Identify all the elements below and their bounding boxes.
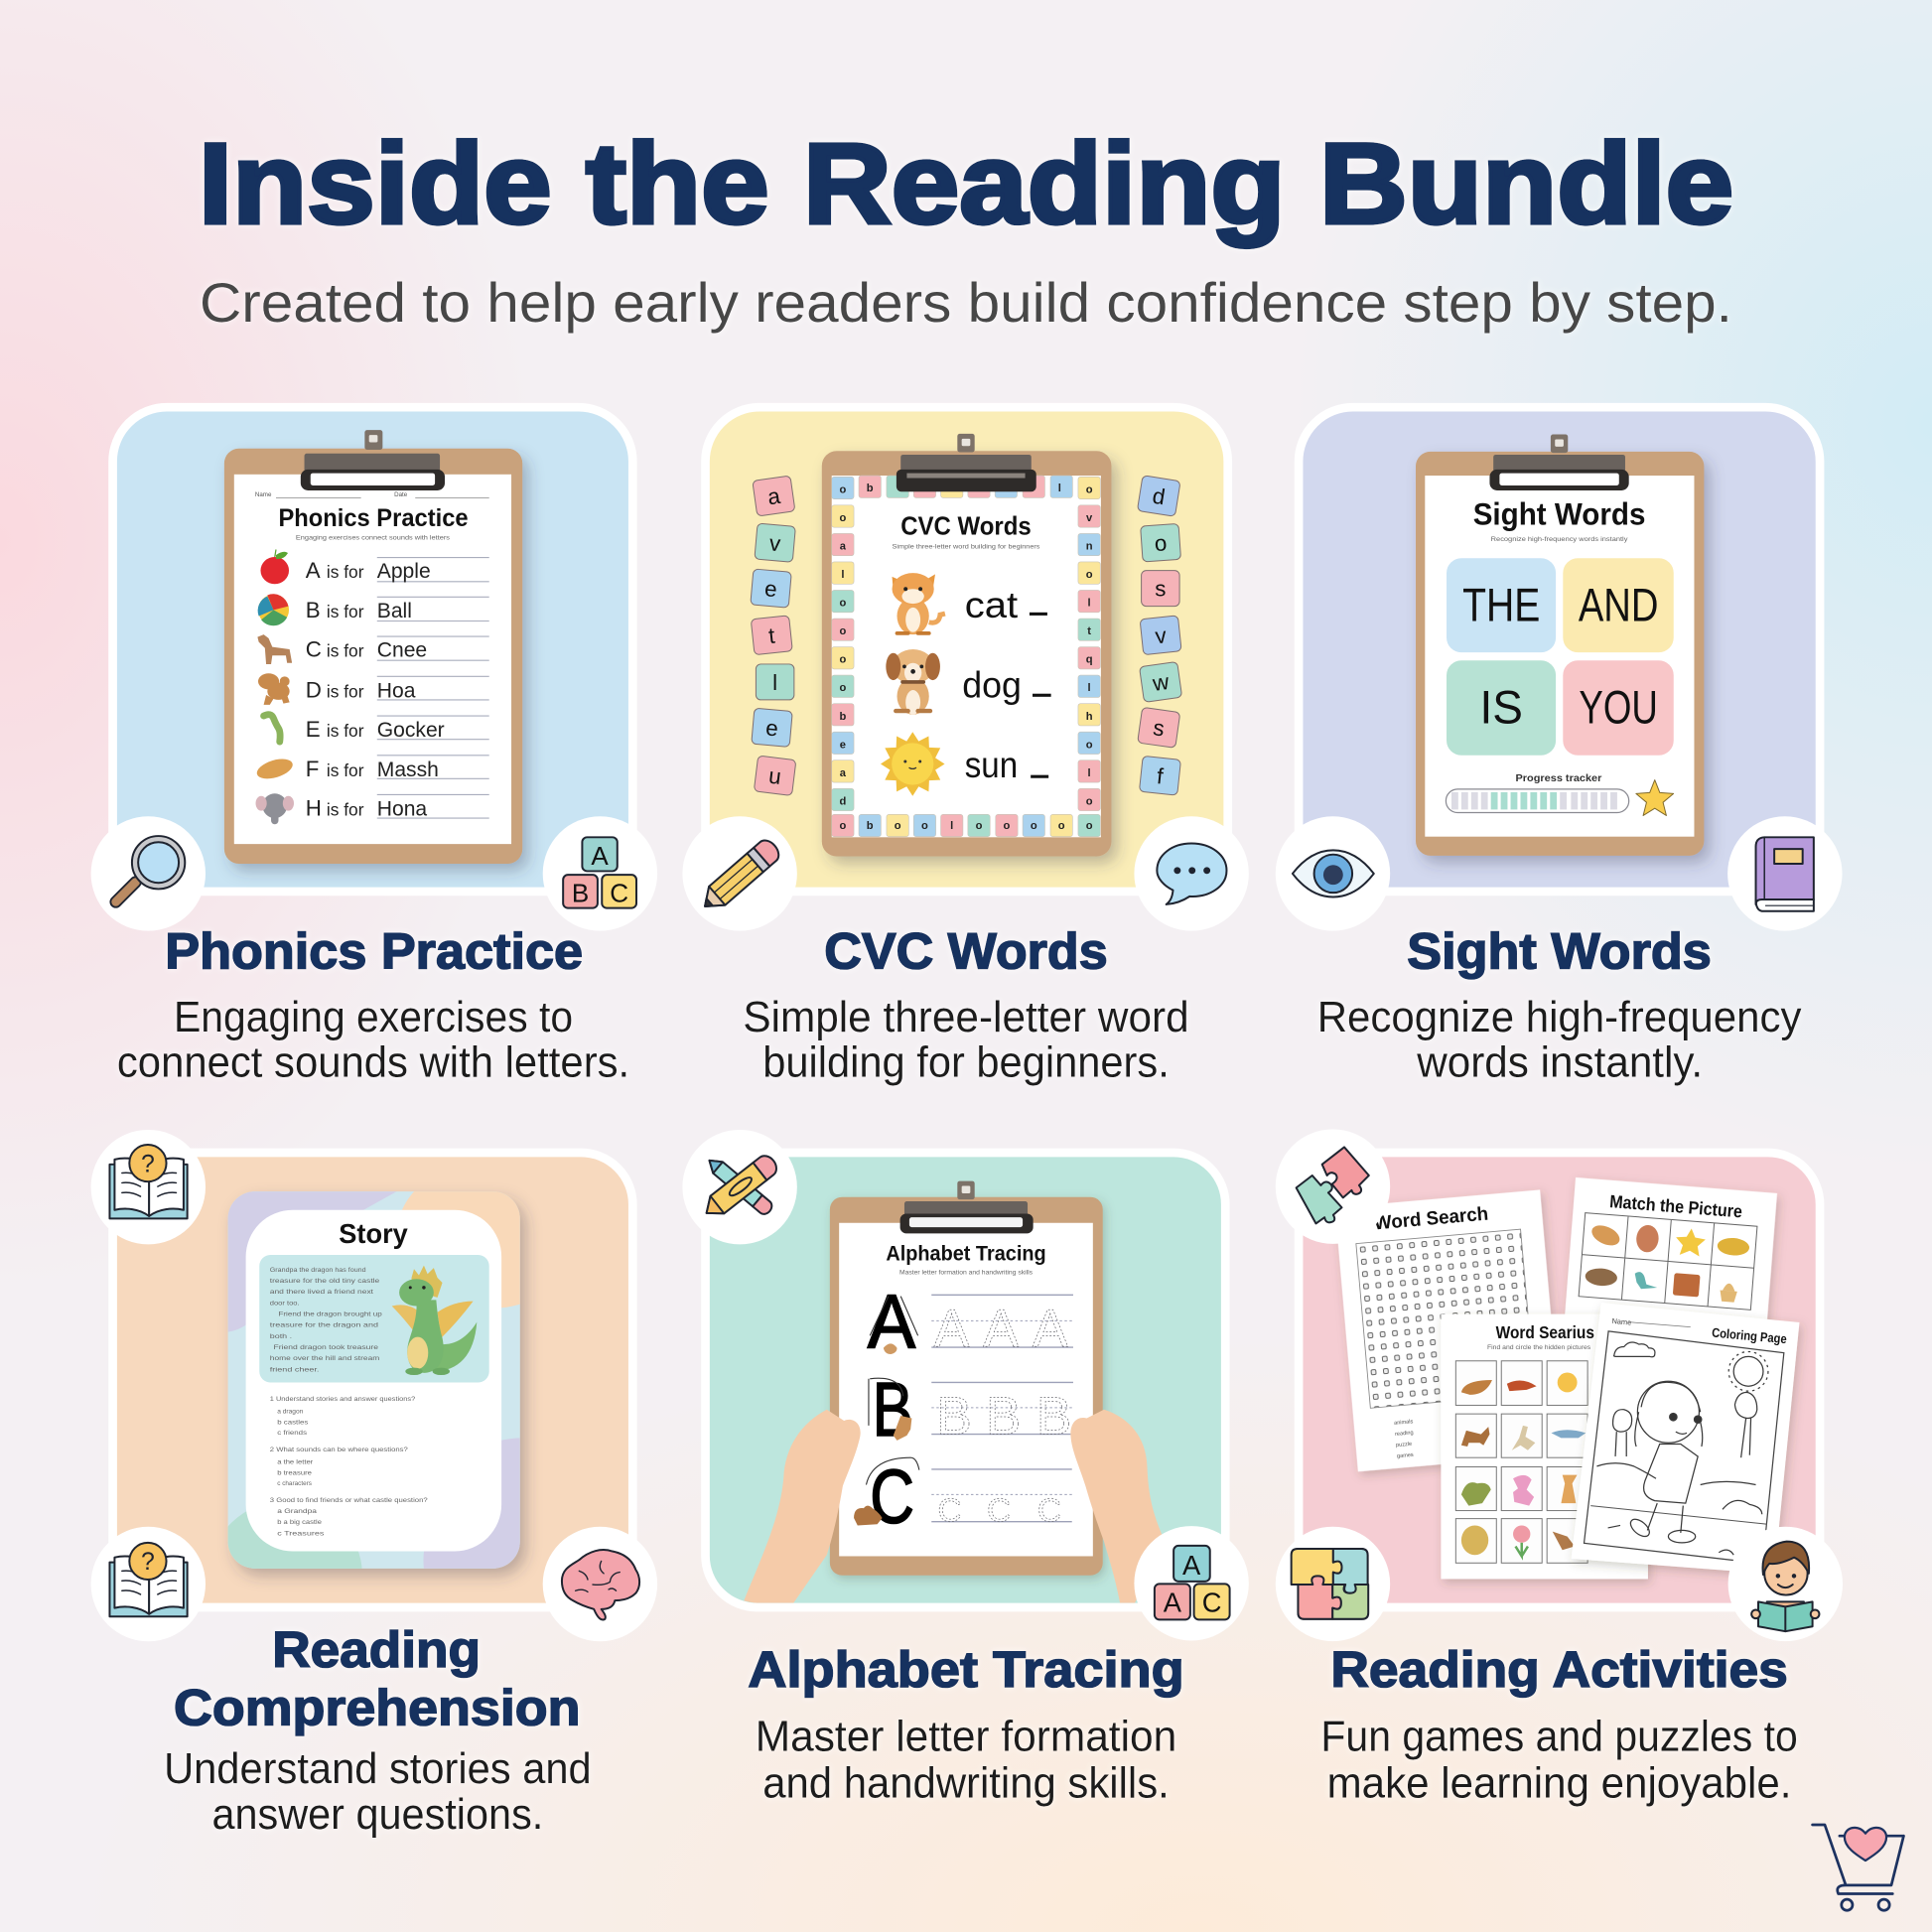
questions: c characters — [277, 1480, 312, 1487]
panel: reading activities — [1299, 1153, 1820, 1607]
dotted tracing letters: B — [936, 1388, 972, 1447]
hands — [743, 1410, 1165, 1603]
letter tiles right — [1137, 476, 1182, 795]
letter tiles right: d — [1151, 483, 1167, 509]
progress tracker: Progress tracker — [1516, 772, 1601, 784]
reading comprehension description: Understand stories and — [164, 1745, 592, 1793]
sight words description: Recognize high-frequency — [1317, 994, 1802, 1041]
dotted tracing letters: C — [1037, 1493, 1061, 1530]
worksheet: coloring page: Coloring Page — [1712, 1325, 1787, 1346]
icon: abc blocks: C — [610, 878, 628, 907]
icon: abc blocks — [543, 816, 657, 931]
worksheet rows: B — [306, 598, 321, 622]
worksheet: word searius: Word Searius — [1496, 1322, 1594, 1342]
letter tiles right: v — [1154, 622, 1169, 648]
border tile letters: o — [1086, 795, 1093, 807]
icon: eye — [1276, 816, 1390, 931]
clipboard: phonics worksheet: Engaging exercises connect sounds with letters — [296, 535, 450, 542]
border tile letters: l — [1058, 483, 1061, 494]
reading activities description: make learning enjoyable. — [1327, 1760, 1792, 1808]
icon: star — [1636, 780, 1674, 815]
worksheet rows: Ball — [377, 600, 412, 622]
dotted tracing letters: B — [1036, 1388, 1071, 1447]
worksheet: coloring page: Name — [1611, 1316, 1632, 1327]
icon: brown animal — [258, 673, 290, 705]
clipboard: tracing worksheet: Alphabet Tracing — [886, 1243, 1046, 1266]
icon: book with question top: ? — [141, 1151, 155, 1177]
border tile letters: b — [867, 483, 874, 494]
worksheet: word search: games — [1397, 1452, 1414, 1459]
worksheet: word search: books — [1444, 1426, 1459, 1434]
worksheet rows: Hoa — [377, 679, 416, 702]
cvc heading: CVC Words — [824, 922, 1108, 979]
letter tiles left: l — [772, 670, 777, 695]
cvc words list: sun — [965, 744, 1018, 785]
word tile: YOU: YOU — [1579, 681, 1658, 734]
worksheet rows: D — [306, 677, 322, 702]
clipboard: sight words worksheet: Sight Words — [1473, 497, 1645, 532]
dotted tracing letters: A — [983, 1300, 1019, 1358]
border tile letters: a — [840, 541, 847, 553]
icon: puzzle square — [1276, 1527, 1390, 1641]
clipboard: cvc worksheet — [822, 434, 1111, 857]
story text: friend cheer. — [270, 1366, 320, 1373]
border tile letters: d — [839, 795, 846, 807]
story text: Friend the dragon brought up — [278, 1311, 382, 1317]
reading activities description — [1320, 1714, 1798, 1808]
story text: home over the hill and stream — [270, 1355, 379, 1362]
cvc description: building for beginners. — [762, 1039, 1170, 1087]
border tile letters: o — [839, 483, 846, 495]
reading comprehension heading: Comprehension — [174, 1679, 581, 1735]
letter tiles left: u — [767, 763, 782, 789]
reading activities description: Fun games and puzzles to — [1320, 1714, 1798, 1761]
dotted tracing letters: A — [1033, 1300, 1068, 1358]
worksheet rows: A — [306, 558, 321, 583]
icon: magnifying glass — [91, 816, 206, 931]
border tile letters — [839, 483, 1093, 832]
icon: boy reading — [1728, 1527, 1843, 1641]
word tile: IS — [1447, 660, 1556, 756]
reading comprehension heading — [174, 1621, 581, 1735]
worksheet rows: Cnee — [377, 638, 427, 661]
worksheet rows: Massh — [377, 759, 439, 781]
worksheet rows: E — [306, 717, 321, 742]
alphabet tracing description: and handwriting skills. — [762, 1760, 1170, 1808]
border tile letters: o — [839, 682, 846, 694]
worksheet rows: is for — [327, 721, 364, 741]
model letters: B — [873, 1367, 913, 1452]
clipboard: phonics worksheet: Phonics Practice — [278, 505, 469, 532]
worksheet rows: is for — [327, 602, 364, 621]
worksheet rows: H — [306, 796, 322, 821]
worksheet rows: is for — [327, 640, 364, 660]
worksheet: word search: words — [1442, 1415, 1458, 1423]
clipboard: sight words worksheet — [1416, 434, 1704, 856]
cvc description — [743, 994, 1189, 1087]
questions: 2 What sounds can be where questions? — [270, 1447, 408, 1453]
worksheet rows: is for — [327, 562, 364, 582]
letter tiles right: s — [1152, 715, 1166, 742]
panel: sight words — [1299, 407, 1820, 892]
icon: brain — [543, 1527, 657, 1641]
icon: cat — [893, 573, 945, 634]
clipboard: sight words worksheet: Recognize high-frequency words instantly — [1491, 536, 1628, 543]
icon: ball — [258, 594, 289, 625]
questions: b a big castle — [277, 1519, 322, 1526]
worksheet rows: is for — [327, 800, 364, 820]
border tile letters: l — [1088, 767, 1091, 779]
worksheet rows: is for — [327, 760, 364, 780]
letter tiles left: a — [766, 483, 782, 509]
icon: book with question bottom: ? — [141, 1549, 155, 1576]
worksheet: word searius: Find and circle the hidden pictures — [1487, 1344, 1590, 1351]
icon: horse — [257, 634, 292, 664]
reading comprehension description: answer questions. — [211, 1791, 543, 1839]
icon: shopping cart with heart — [1813, 1825, 1903, 1910]
border tile letters: o — [839, 820, 846, 832]
story text: door too. — [270, 1300, 300, 1307]
border tile letters: q — [1086, 654, 1093, 666]
worksheet: match the picture — [1564, 1177, 1777, 1340]
dotted tracing letters: C — [937, 1493, 962, 1530]
cvc description: Simple three-letter word — [743, 994, 1189, 1041]
icon: crossed crayons — [682, 1130, 797, 1244]
story card — [225, 1190, 535, 1585]
worksheet: word search: Word Search — [1373, 1204, 1489, 1235]
model letters: A — [868, 1280, 916, 1365]
icon: aac blocks — [1134, 1526, 1249, 1640]
border tile letters: v — [1086, 512, 1093, 524]
letter tiles right: w — [1150, 669, 1172, 696]
questions: 3 Good to find friends or what castle question? — [270, 1497, 428, 1504]
reading activities heading: Reading Activities — [1330, 1641, 1788, 1698]
dotted tracing letters: C — [987, 1493, 1011, 1530]
word tile: THE: THE — [1462, 578, 1540, 630]
clipboard: cvc worksheet: CVC Words — [900, 511, 1032, 541]
clipboard: phonics worksheet — [224, 430, 522, 864]
panel: cvc words — [706, 407, 1228, 892]
phonics description: Engaging exercises to — [174, 994, 573, 1041]
letter tiles left: t — [767, 622, 777, 648]
border tile letters: o — [1031, 820, 1037, 832]
icon: speech bubble — [1134, 816, 1249, 931]
letter tiles right: f — [1156, 763, 1166, 789]
coloring page line art — [1596, 1342, 1768, 1555]
cvc words list: cat — [965, 584, 1019, 625]
border tile letters: o — [839, 512, 846, 524]
story card: Story — [339, 1218, 409, 1249]
border tile letters: l — [950, 820, 953, 832]
border tile letters: o — [1086, 569, 1093, 581]
icon: purple book — [1727, 816, 1843, 931]
border tile letters: o — [839, 598, 846, 610]
word tile: THE — [1447, 558, 1556, 652]
icon: elephant — [256, 793, 294, 824]
icon: aac blocks: A — [1182, 1550, 1201, 1581]
questions: c friends — [277, 1430, 307, 1437]
border tile letters: o — [976, 820, 983, 832]
panel: reading comprehension — [113, 1153, 632, 1649]
subtitle: Created to help early readers build confidence step by step. — [200, 271, 1732, 334]
border tile letters: o — [895, 820, 901, 832]
letter tiles left — [751, 476, 796, 795]
story text — [270, 1267, 382, 1373]
word tile: IS: IS — [1480, 681, 1523, 734]
border tile letters: e — [840, 739, 846, 751]
border tile letters: o — [1086, 820, 1093, 832]
border tile letters: o — [839, 625, 846, 637]
worksheet rows: F — [306, 757, 319, 781]
alphabet border tiles — [832, 476, 1100, 837]
word tile: YOU — [1563, 660, 1674, 756]
worksheet: word search: animals — [1394, 1419, 1414, 1427]
icon: abc blocks: A — [591, 841, 609, 871]
questions: 1 Understand stories and answer questions? — [270, 1396, 416, 1403]
worksheet rows: Gocker — [377, 719, 445, 742]
worksheet rows: C — [306, 636, 322, 661]
story text: Grandpa the dragon has found — [270, 1267, 366, 1274]
letter tiles right: o — [1154, 530, 1168, 556]
worksheet: word search — [1335, 1189, 1563, 1471]
story text: treasure for the old tiny castle — [270, 1278, 380, 1285]
panel: alphabet tracing — [706, 1153, 1225, 1607]
icon: bread — [254, 756, 295, 782]
worksheet: word search: reading — [1395, 1430, 1414, 1438]
dotted tracing letters — [934, 1300, 1071, 1530]
worksheet rows — [306, 558, 489, 821]
word tile: AND: AND — [1579, 578, 1658, 630]
story text: treasure for the dragon and — [270, 1322, 379, 1329]
model letters — [854, 1280, 919, 1540]
icon: apple — [260, 550, 289, 584]
story text: and there lived a friend next — [270, 1289, 373, 1296]
border tile letters: l — [1088, 682, 1091, 694]
letter tiles right: s — [1155, 577, 1166, 602]
model letters: C — [870, 1454, 914, 1540]
questions: b castles — [277, 1420, 308, 1427]
dotted tracing letters: B — [986, 1388, 1021, 1447]
worksheet rows: Hona — [377, 798, 427, 821]
worksheet rows: is for — [327, 681, 364, 701]
sight words heading: Sight Words — [1407, 922, 1712, 979]
clipboard: cvc worksheet: Simple three-letter word building for beginners — [893, 543, 1039, 550]
border tile letters: t — [1087, 625, 1091, 637]
clipboard: phonics worksheet: Name — [255, 491, 272, 498]
questions: c Treasures — [277, 1530, 324, 1537]
border tile letters: o — [921, 820, 928, 832]
panel: phonics practice — [113, 407, 632, 892]
title: Inside the Reading Bundle — [199, 121, 1733, 248]
word tile: AND — [1563, 558, 1674, 652]
icon: sun — [881, 732, 945, 796]
dotted tracing letters: A — [934, 1300, 970, 1358]
alphabet tracing heading: Alphabet Tracing — [748, 1641, 1184, 1698]
alphabet tracing description — [756, 1714, 1176, 1808]
letter tiles left: e — [764, 715, 779, 741]
tracing guide lines — [931, 1295, 1073, 1522]
icon: snake — [264, 715, 280, 742]
icon: aac blocks: A — [1164, 1587, 1182, 1617]
story text: both . — [270, 1333, 292, 1340]
alphabet tracing description: Master letter formation — [756, 1714, 1176, 1761]
clipboard: phonics worksheet: Date — [394, 491, 408, 498]
border tile letters: b — [867, 820, 874, 832]
letter tiles left: e — [763, 576, 778, 602]
questions: a Grandpa — [277, 1508, 318, 1515]
letter tiles left: v — [768, 530, 782, 556]
sight words description: words instantly. — [1416, 1039, 1703, 1087]
icon: dog — [886, 649, 940, 715]
questions: b treasure — [277, 1470, 312, 1477]
reading comprehension description — [164, 1745, 592, 1839]
border tile letters: a — [840, 767, 847, 779]
cvc words list — [962, 584, 1051, 785]
progress tracker — [1446, 772, 1629, 812]
icon: book with question bottom — [91, 1527, 206, 1641]
clipboard: tracing worksheet — [830, 1181, 1103, 1576]
border tile letters: o — [1004, 820, 1011, 832]
icon: book with question top — [91, 1130, 206, 1244]
worksheet rows: Apple — [377, 560, 431, 583]
sight words description — [1317, 994, 1802, 1087]
phonics description — [117, 994, 629, 1087]
phonics heading: Phonics Practice — [165, 922, 583, 979]
icon: pencil — [682, 816, 797, 931]
questions — [270, 1396, 428, 1537]
border tile letters: o — [1086, 483, 1093, 495]
questions: a dragon — [277, 1409, 304, 1416]
phonics description: connect sounds with letters. — [117, 1039, 629, 1087]
icon: puzzle pieces — [1276, 1129, 1390, 1244]
border tile letters: o — [1058, 820, 1065, 832]
border tile letters: l — [1088, 598, 1091, 610]
icon: abc blocks: B — [572, 878, 589, 907]
reading comprehension heading: Reading — [272, 1621, 481, 1678]
border tile letters: n — [1086, 541, 1093, 553]
questions: a the letter — [277, 1458, 314, 1465]
border tile letters: l — [841, 569, 844, 581]
worksheet: coloring page — [1572, 1303, 1799, 1574]
border tile letters: b — [839, 711, 846, 723]
cvc words list: dog — [962, 663, 1022, 705]
border tile letters: o — [1086, 739, 1093, 751]
worksheet: match the picture: Match the Picture — [1609, 1191, 1743, 1222]
story text: Friend dragon took treasure — [274, 1344, 379, 1351]
border tile letters: o — [839, 654, 846, 666]
icon: dragon — [392, 1266, 477, 1375]
worksheet: word searius — [1441, 1314, 1648, 1579]
border tile letters: h — [1086, 711, 1093, 723]
clipboard: tracing worksheet: Master letter formation and handwriting skills — [899, 1269, 1033, 1276]
icon: aac blocks: C — [1202, 1587, 1221, 1617]
worksheet: word search: puzzle — [1396, 1442, 1412, 1449]
